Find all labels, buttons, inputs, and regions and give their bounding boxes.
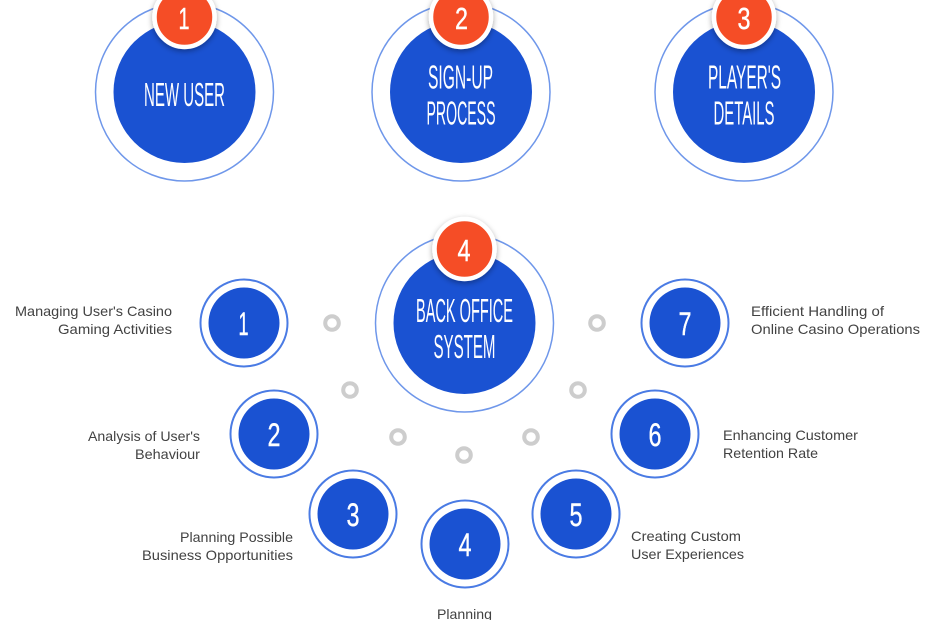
node 1: 1	[238, 306, 248, 342]
node 7: 7	[678, 306, 692, 342]
node 1	[200, 280, 288, 366]
label 7	[751, 303, 920, 337]
label 2	[88, 428, 200, 462]
label 1	[15, 303, 172, 337]
label 2: Analysis of User's	[88, 428, 200, 444]
label 3	[142, 529, 293, 563]
step 4: back office system: SYSTEM	[434, 328, 496, 365]
node 2: 2	[268, 417, 280, 453]
step 3: player's details: DETAILS	[714, 94, 774, 132]
node 4: 4	[458, 527, 472, 563]
step 4: back office system: BACK OFFICE	[416, 292, 513, 329]
step 2: sign-up process: 2	[455, 1, 468, 36]
step 3: player's details	[655, 0, 833, 181]
node 6: 6	[648, 417, 662, 453]
node 7	[642, 280, 728, 366]
label 3: Planning Possible	[180, 529, 293, 545]
label 1: Managing User's Casino	[15, 303, 172, 319]
step 3: player's details: PLAYER'S	[708, 58, 781, 96]
label 3: Business Opportunities	[142, 547, 293, 563]
label 6: Retention Rate	[723, 445, 818, 461]
step 4: back office system: 4	[458, 233, 470, 268]
label 6	[723, 427, 858, 461]
label 5: User Experiences	[631, 546, 744, 562]
label 7: Online Casino Operations	[751, 321, 920, 337]
label 7: Efficient Handling of	[751, 303, 884, 319]
step 2: sign-up process: SIGN-UP	[428, 58, 493, 96]
step 1: new user	[96, 0, 274, 181]
connector dots	[325, 316, 604, 462]
step 4: back office system	[376, 219, 554, 412]
step 3: player's details: 3	[738, 1, 750, 36]
node 4	[422, 500, 508, 588]
node 5	[532, 470, 620, 558]
node 3: 3	[346, 497, 360, 533]
label 5: Creating Custom	[631, 528, 741, 544]
step 1: new user: NEW USER	[144, 76, 225, 113]
step 1: new user: 1	[178, 1, 190, 36]
node 5: 5	[570, 497, 582, 533]
label 2: Behaviour	[135, 446, 200, 462]
node 3	[310, 470, 396, 558]
label 5	[631, 528, 744, 562]
node 6	[612, 390, 698, 478]
step 2: sign-up process: PROCESS	[426, 94, 496, 132]
label 6: Enhancing Customer	[723, 427, 858, 443]
node 2	[230, 390, 318, 478]
step 2: sign-up process	[372, 0, 550, 181]
label 1: Gaming Activities	[58, 321, 172, 337]
